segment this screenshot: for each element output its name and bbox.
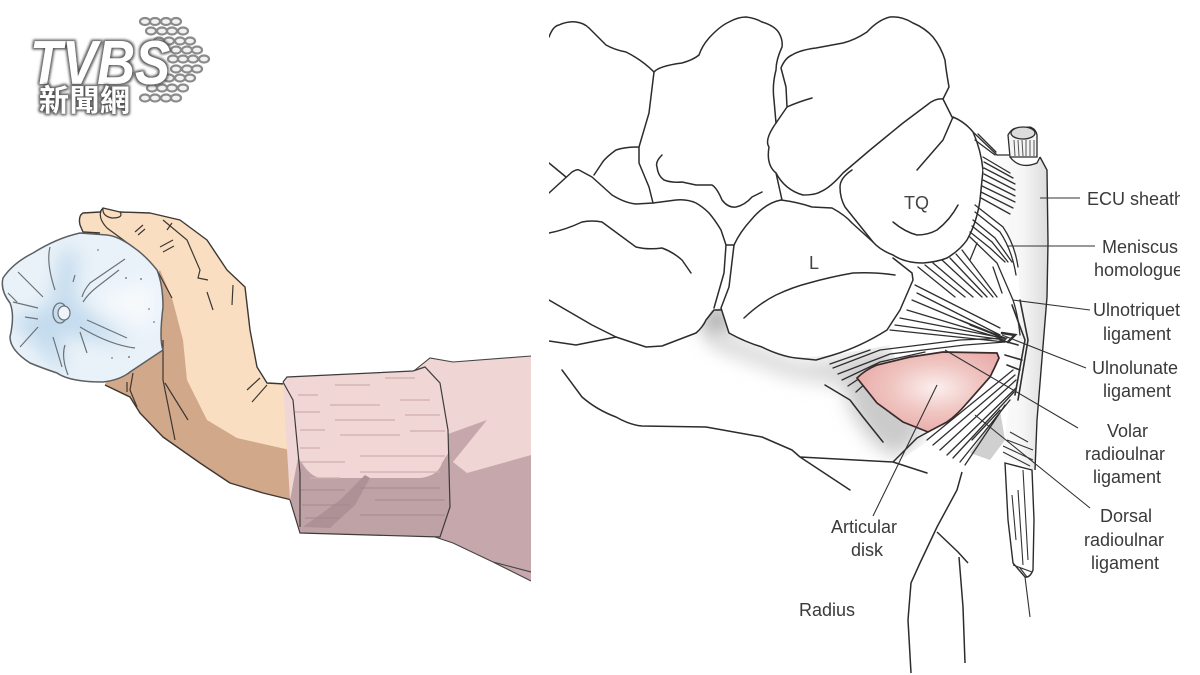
bone labels [809, 193, 929, 273]
bone labels: TQ [904, 193, 929, 213]
anatomy labels: ligament [1091, 553, 1159, 573]
panel: hand with water bottle illustration [2, 208, 531, 581]
anatomy labels: homologue [1094, 260, 1183, 280]
logo wordmark: TVBS [30, 29, 170, 98]
anatomy labels: Ulnotriquetral [1093, 300, 1200, 320]
radius bone shading [701, 304, 925, 458]
shirt cuff [283, 367, 450, 537]
anatomy labels: ligament [1093, 467, 1161, 487]
logo dots [140, 18, 209, 102]
anatomy labels: ligament [1103, 324, 1171, 344]
anatomy labels: ligament [1103, 381, 1171, 401]
ligament fibres [830, 132, 1028, 465]
sleeve [415, 356, 531, 581]
anatomy labels: ECU sheath [1087, 189, 1184, 209]
anatomy labels: radioulnar [1084, 530, 1164, 550]
articular disk [857, 352, 999, 432]
anatomy labels: Articular [831, 517, 897, 537]
anatomy labels: Radius [799, 600, 855, 620]
leader lines [873, 198, 1095, 516]
anatomy labels [799, 189, 1200, 620]
anatomy labels: Meniscus [1102, 237, 1178, 257]
anatomy labels: radioulnar [1085, 444, 1165, 464]
water bottle [2, 233, 163, 382]
ulna lower outline [908, 472, 968, 673]
carpal bone outlines [549, 17, 983, 490]
arm and hand [79, 208, 300, 502]
panel: wrist anatomy diagram [549, 17, 1200, 673]
anatomy labels: Volar [1107, 421, 1148, 441]
logo subtitle: 新聞網 [39, 76, 130, 120]
bone labels: L [809, 253, 819, 273]
tendon lower [1005, 463, 1034, 577]
ECU tendon and sheath [983, 127, 1048, 617]
logo: TVBS news network [30, 18, 209, 120]
grey patch beside ulnar head [970, 410, 1005, 460]
anatomy labels: Ulnolunate [1092, 358, 1178, 378]
anatomy labels: Dorsal [1100, 506, 1152, 526]
tendon top [1008, 127, 1037, 157]
anatomy labels: disk [851, 540, 884, 560]
